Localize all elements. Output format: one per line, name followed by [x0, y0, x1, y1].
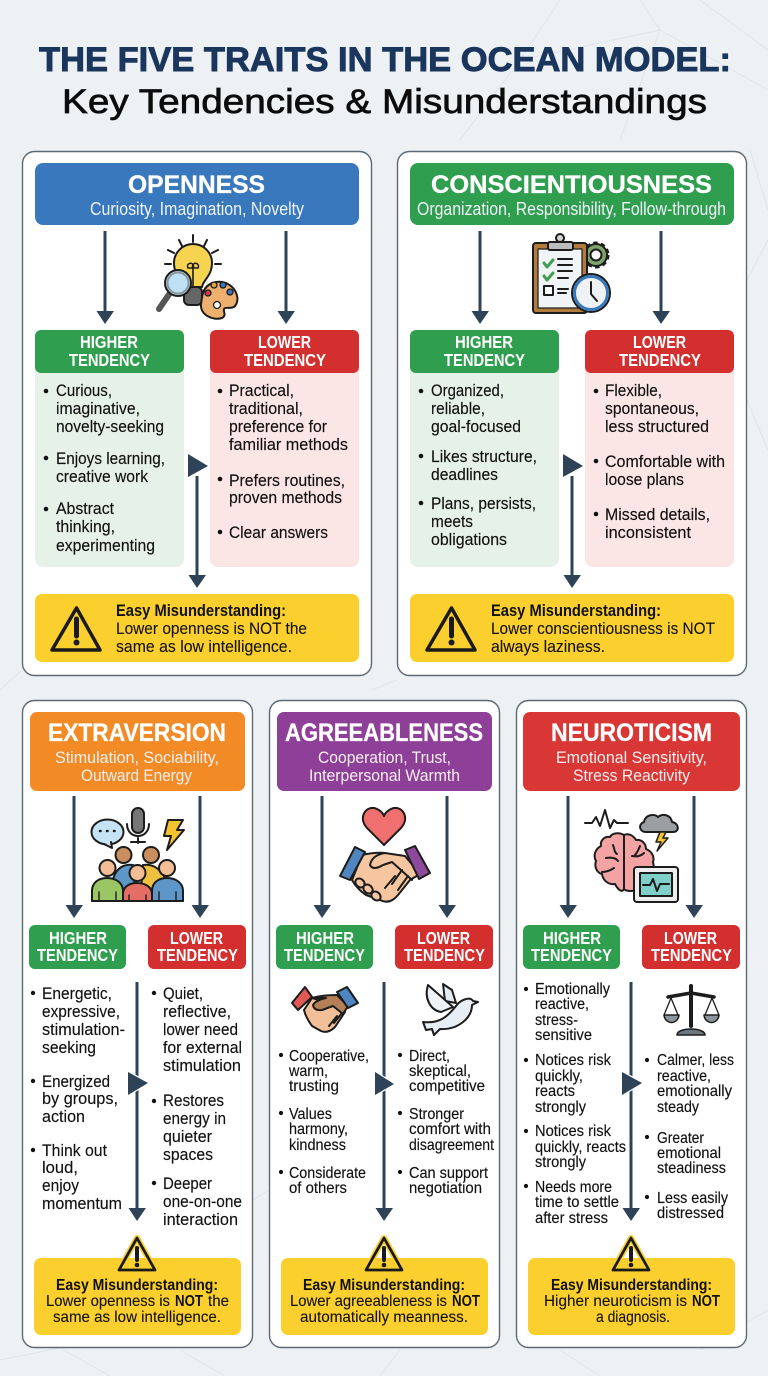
callout: misunderstanding: Easy Misunderstanding:: [116, 601, 286, 620]
arrow: to misunderstanding: [564, 476, 581, 588]
higher tendency column: Notices risk: [535, 1123, 612, 1140]
lower tendency column: Stronger: [409, 1106, 465, 1123]
lower tendency column: TENDENCY: [244, 350, 326, 370]
icon: bulb, magnifier and palette: [159, 235, 237, 319]
lower tendency column: competitive: [409, 1078, 485, 1095]
higher tendency column: Plans, persists,: [431, 494, 536, 513]
lower tendency column: proven methods: [229, 488, 342, 507]
lower tendency column: disagreement: [409, 1137, 494, 1154]
lower tendency column: Restores: [163, 1091, 224, 1110]
header: extraversion: Outward Energy: [81, 766, 192, 785]
higher tendency column: quickly, reacts: [535, 1139, 626, 1156]
higher tendency column: meets: [431, 512, 473, 531]
callout: misunderstanding: NOT: [175, 1293, 203, 1310]
lower tendency column: Less easily: [657, 1190, 728, 1207]
lower tendency column: stimulation: [163, 1056, 241, 1075]
higher tendency column: [276, 925, 373, 1197]
callout: misunderstanding: Easy Misunderstanding:: [551, 1277, 712, 1294]
callout: misunderstanding: Lower openness is: [46, 1293, 170, 1310]
icon: brain, cloud and monitor: [585, 810, 678, 902]
lower tendency column: negotiation: [409, 1180, 482, 1197]
lower tendency column: TENDENCY: [651, 945, 732, 965]
lower tendency column: [148, 925, 246, 1229]
header: agreeableness: Interpersonal Warmth: [309, 766, 460, 785]
callout: misunderstanding: always laziness.: [491, 637, 605, 656]
higher tendency column: Considerate: [289, 1165, 366, 1182]
icon: dove: [423, 984, 478, 1035]
higher tendency column: reliable,: [431, 399, 485, 418]
higher tendency column: action: [42, 1107, 85, 1126]
lower tendency column: inconsistent: [605, 523, 691, 542]
higher tendency column: warm,: [288, 1063, 328, 1080]
lower tendency column: Direct,: [409, 1048, 450, 1065]
higher tendency column: HIGHER: [49, 928, 107, 948]
header: extraversion: EXTRAVERSION: [48, 719, 226, 747]
higher tendency column: Organized,: [431, 381, 504, 400]
lower tendency column: traditional,: [229, 399, 303, 418]
higher tendency column: seeking: [42, 1038, 96, 1057]
callout: misunderstanding: [528, 1238, 735, 1335]
higher tendency column: TENDENCY: [444, 350, 525, 370]
lower tendency column: Greater: [657, 1130, 705, 1147]
arrow: to lower: [192, 796, 209, 918]
higher tendency column: sensitive: [535, 1027, 592, 1044]
higher tendency column: HIGHER: [543, 928, 601, 948]
arrow: higher to lower: [563, 454, 583, 477]
header: neuroticism: [523, 712, 740, 791]
lower tendency column: Comfortable with: [605, 452, 725, 471]
panel: neuroticism: [516, 700, 746, 1348]
lower tendency column: LOWER: [170, 928, 223, 948]
lower tendency column: [395, 925, 494, 1197]
header: conscientiousness: Organization, Responsibility, Follow-through: [417, 199, 726, 219]
higher tendency column: HIGHER: [455, 332, 513, 352]
panel: extraversion: [22, 700, 252, 1348]
lower tendency column: Can support: [409, 1165, 488, 1182]
higher tendency column: time to settle: [535, 1194, 619, 1211]
title: THE FIVE TRAITS IN THE OCEAN MODEL:: [39, 41, 731, 79]
lower tendency column: quieter: [163, 1127, 212, 1146]
lower tendency column: familiar methods: [229, 435, 348, 454]
lower tendency column: [642, 925, 740, 1222]
callout: misunderstanding: [34, 1238, 241, 1335]
header: agreeableness: Cooperation, Trust,: [318, 748, 451, 767]
lower tendency column: spaces: [163, 1145, 213, 1164]
icon: group with speech, mic and lightning: [92, 808, 184, 901]
higher tendency column: TENDENCY: [37, 945, 118, 965]
lower tendency column: Flexible,: [605, 381, 662, 400]
callout: misunderstanding: same as low intelligence.: [53, 1309, 221, 1326]
higher tendency column: quickly,: [535, 1068, 583, 1085]
higher tendency column: reactive,: [535, 996, 589, 1013]
higher tendency column: stress-: [535, 1012, 578, 1029]
header: extraversion: Stimulation, Sociability,: [55, 748, 219, 767]
lower tendency column: comfort with: [409, 1121, 491, 1138]
header: agreeableness: AGREEABLENESS: [285, 719, 483, 747]
lower tendency column: preference for: [229, 417, 327, 436]
higher tendency column: trusting: [289, 1078, 339, 1095]
higher tendency column: Enjoys learning,: [56, 449, 165, 468]
lower tendency column: lower need: [163, 1020, 238, 1039]
higher tendency column: stimulation-: [42, 1020, 125, 1039]
arrow: to lower: [652, 231, 670, 324]
callout: misunderstanding: Easy Misunderstanding:: [303, 1277, 465, 1294]
lower tendency column: TENDENCY: [404, 945, 485, 965]
lower tendency column: energy in: [163, 1109, 226, 1128]
arrow: to higher: [66, 796, 83, 918]
lower tendency column: LOWER: [417, 928, 470, 948]
lower tendency column: reactive,: [657, 1068, 711, 1085]
higher tendency column: [29, 925, 126, 1213]
lower tendency column: [585, 330, 734, 567]
lower tendency column: loose plans: [605, 470, 684, 489]
arrow: to higher: [472, 231, 489, 324]
higher tendency column: novelty-seeking: [56, 417, 164, 436]
lower tendency column: Missed details,: [605, 505, 710, 524]
arrow: to misunderstanding: [128, 982, 146, 1221]
higher tendency column: Curious,: [56, 381, 112, 400]
panel: conscientiousness: [398, 152, 746, 676]
lower tendency column: reflective,: [163, 1002, 231, 1021]
higher tendency column: TENDENCY: [284, 945, 365, 965]
higher tendency column: Likes structure,: [431, 447, 537, 466]
arrow: higher to lower: [622, 1072, 642, 1095]
higher tendency column: momentum: [42, 1194, 122, 1213]
arrow: to lower: [686, 796, 703, 918]
higher tendency column: Think out: [42, 1141, 107, 1160]
lower tendency column: less structured: [605, 417, 709, 436]
lower tendency column: TENDENCY: [157, 945, 238, 965]
header: neuroticism: NEUROTICISM: [551, 719, 712, 747]
callout: misunderstanding: Easy Misunderstanding:: [56, 1277, 218, 1294]
higher tendency column: enjoy: [42, 1176, 79, 1195]
header: conscientiousness: [410, 163, 734, 225]
higher tendency column: Notices risk: [535, 1052, 612, 1069]
lower tendency column: steady: [657, 1099, 699, 1116]
higher tendency column: Cooperative,: [289, 1048, 369, 1065]
arrow: to lower: [438, 796, 456, 918]
callout: misunderstanding: Lower conscientiousness is NOT: [491, 619, 715, 638]
header: openness: OPENNESS: [128, 171, 265, 199]
arrow: to misunderstanding: [188, 476, 206, 588]
higher tendency column: TENDENCY: [531, 945, 612, 965]
higher tendency column: deadlines: [431, 465, 498, 484]
lower tendency column: emotionally: [657, 1083, 732, 1100]
arrow: higher to lower: [375, 1072, 394, 1095]
header: agreeableness: [277, 712, 492, 791]
lower tendency column: skeptical,: [409, 1063, 471, 1080]
callout: misunderstanding: Lower agreeableness is: [290, 1293, 447, 1310]
higher tendency column: Values: [289, 1106, 332, 1123]
lower tendency column: steadiness: [657, 1160, 726, 1177]
icon: heart and handshake: [340, 808, 430, 902]
higher tendency column: TENDENCY: [69, 350, 150, 370]
higher tendency column: [35, 330, 184, 567]
higher tendency column: Energetic,: [42, 984, 112, 1003]
higher tendency column: strongly: [535, 1099, 586, 1116]
lower tendency column: Clear answers: [229, 523, 328, 542]
arrow: to higher: [560, 796, 577, 918]
header: neuroticism: Stress Reactivity: [573, 766, 690, 785]
higher tendency column: by groups,: [42, 1089, 118, 1108]
higher tendency column: Abstract: [56, 499, 114, 518]
lower tendency column: TENDENCY: [619, 350, 701, 370]
lower tendency column: [210, 330, 359, 567]
higher tendency column: strongly: [535, 1154, 586, 1171]
arrow: higher to lower: [188, 454, 208, 477]
higher tendency column: expressive,: [42, 1002, 120, 1021]
higher tendency column: harmony,: [289, 1121, 348, 1138]
higher tendency column: Needs more: [535, 1179, 612, 1196]
icon: balance scales: [664, 986, 719, 1035]
lower tendency column: emotional: [657, 1145, 721, 1162]
callout: misunderstanding: [281, 1238, 488, 1335]
callout: misunderstanding: a diagnosis.: [596, 1309, 670, 1326]
lower tendency column: Practical,: [229, 381, 294, 400]
lower tendency column: distressed: [657, 1205, 724, 1222]
lower tendency column: LOWER: [258, 332, 311, 352]
header: neuroticism: Emotional Sensitivity,: [556, 748, 707, 767]
higher tendency column: Emotionally: [535, 981, 610, 998]
higher tendency column: [523, 925, 626, 1227]
callout: misunderstanding: Easy Misunderstanding:: [491, 601, 661, 620]
higher tendency column: obligations: [431, 530, 507, 549]
higher tendency column: loud,: [42, 1158, 78, 1177]
lower tendency column: one-on-one: [163, 1192, 242, 1211]
arrow: higher to lower: [128, 1072, 148, 1095]
higher tendency column: goal-focused: [431, 417, 521, 436]
higher tendency column: thinking,: [56, 517, 115, 536]
higher tendency column: Energized: [42, 1072, 110, 1091]
callout: misunderstanding: automatically meanness.: [300, 1309, 468, 1326]
lower tendency column: LOWER: [633, 332, 686, 352]
lower tendency column: Quiet,: [163, 984, 203, 1003]
lower tendency column: LOWER: [664, 928, 717, 948]
higher tendency column: [410, 330, 559, 567]
higher tendency column: after stress: [535, 1210, 608, 1227]
higher tendency column: kindness: [289, 1137, 346, 1154]
panel: agreeableness: [270, 700, 500, 1348]
header: openness: Curiosity, Imagination, Novelty: [90, 199, 304, 219]
arrow: to higher: [314, 796, 331, 918]
arrow: to higher: [96, 231, 114, 324]
callout: misunderstanding: same as low intelligence.: [116, 637, 292, 656]
lower tendency column: interaction: [163, 1210, 238, 1229]
higher tendency column: creative work: [56, 467, 148, 486]
callout: misunderstanding: Lower openness is NOT the: [116, 619, 307, 638]
header: conscientiousness: CONSCIENTIOUSNESS: [431, 171, 712, 199]
lower tendency column: spontaneous,: [605, 399, 699, 418]
higher tendency column: of others: [289, 1180, 347, 1197]
icon: small handshake: [292, 987, 358, 1032]
title: Key Tendencies & Misunderstandings: [62, 83, 707, 121]
callout: misunderstanding: NOT: [452, 1293, 480, 1310]
lower tendency column: Calmer, less: [657, 1052, 734, 1069]
lower tendency column: Deeper: [163, 1174, 212, 1193]
arrow: to lower: [278, 231, 295, 324]
title: [39, 41, 731, 121]
higher tendency column: reacts: [535, 1083, 575, 1100]
header: extraversion: [30, 712, 245, 791]
callout: misunderstanding: [410, 594, 734, 662]
lower tendency column: for external: [163, 1038, 242, 1057]
callout: misunderstanding: the: [208, 1293, 229, 1310]
callout: misunderstanding: [35, 594, 359, 662]
arrow: to misunderstanding: [376, 982, 393, 1221]
callout: misunderstanding: NOT: [692, 1293, 720, 1310]
higher tendency column: imaginative,: [56, 399, 140, 418]
lower tendency column: Prefers routines,: [229, 471, 345, 490]
icon: clipboard, gear and clock: [533, 234, 610, 313]
higher tendency column: HIGHER: [296, 928, 354, 948]
higher tendency column: HIGHER: [80, 332, 138, 352]
callout: misunderstanding: Higher neuroticism is: [544, 1293, 687, 1310]
higher tendency column: experimenting: [56, 536, 155, 555]
arrow: to misunderstanding: [622, 982, 640, 1221]
panel: openness: [22, 152, 372, 676]
header: openness: [35, 163, 359, 225]
